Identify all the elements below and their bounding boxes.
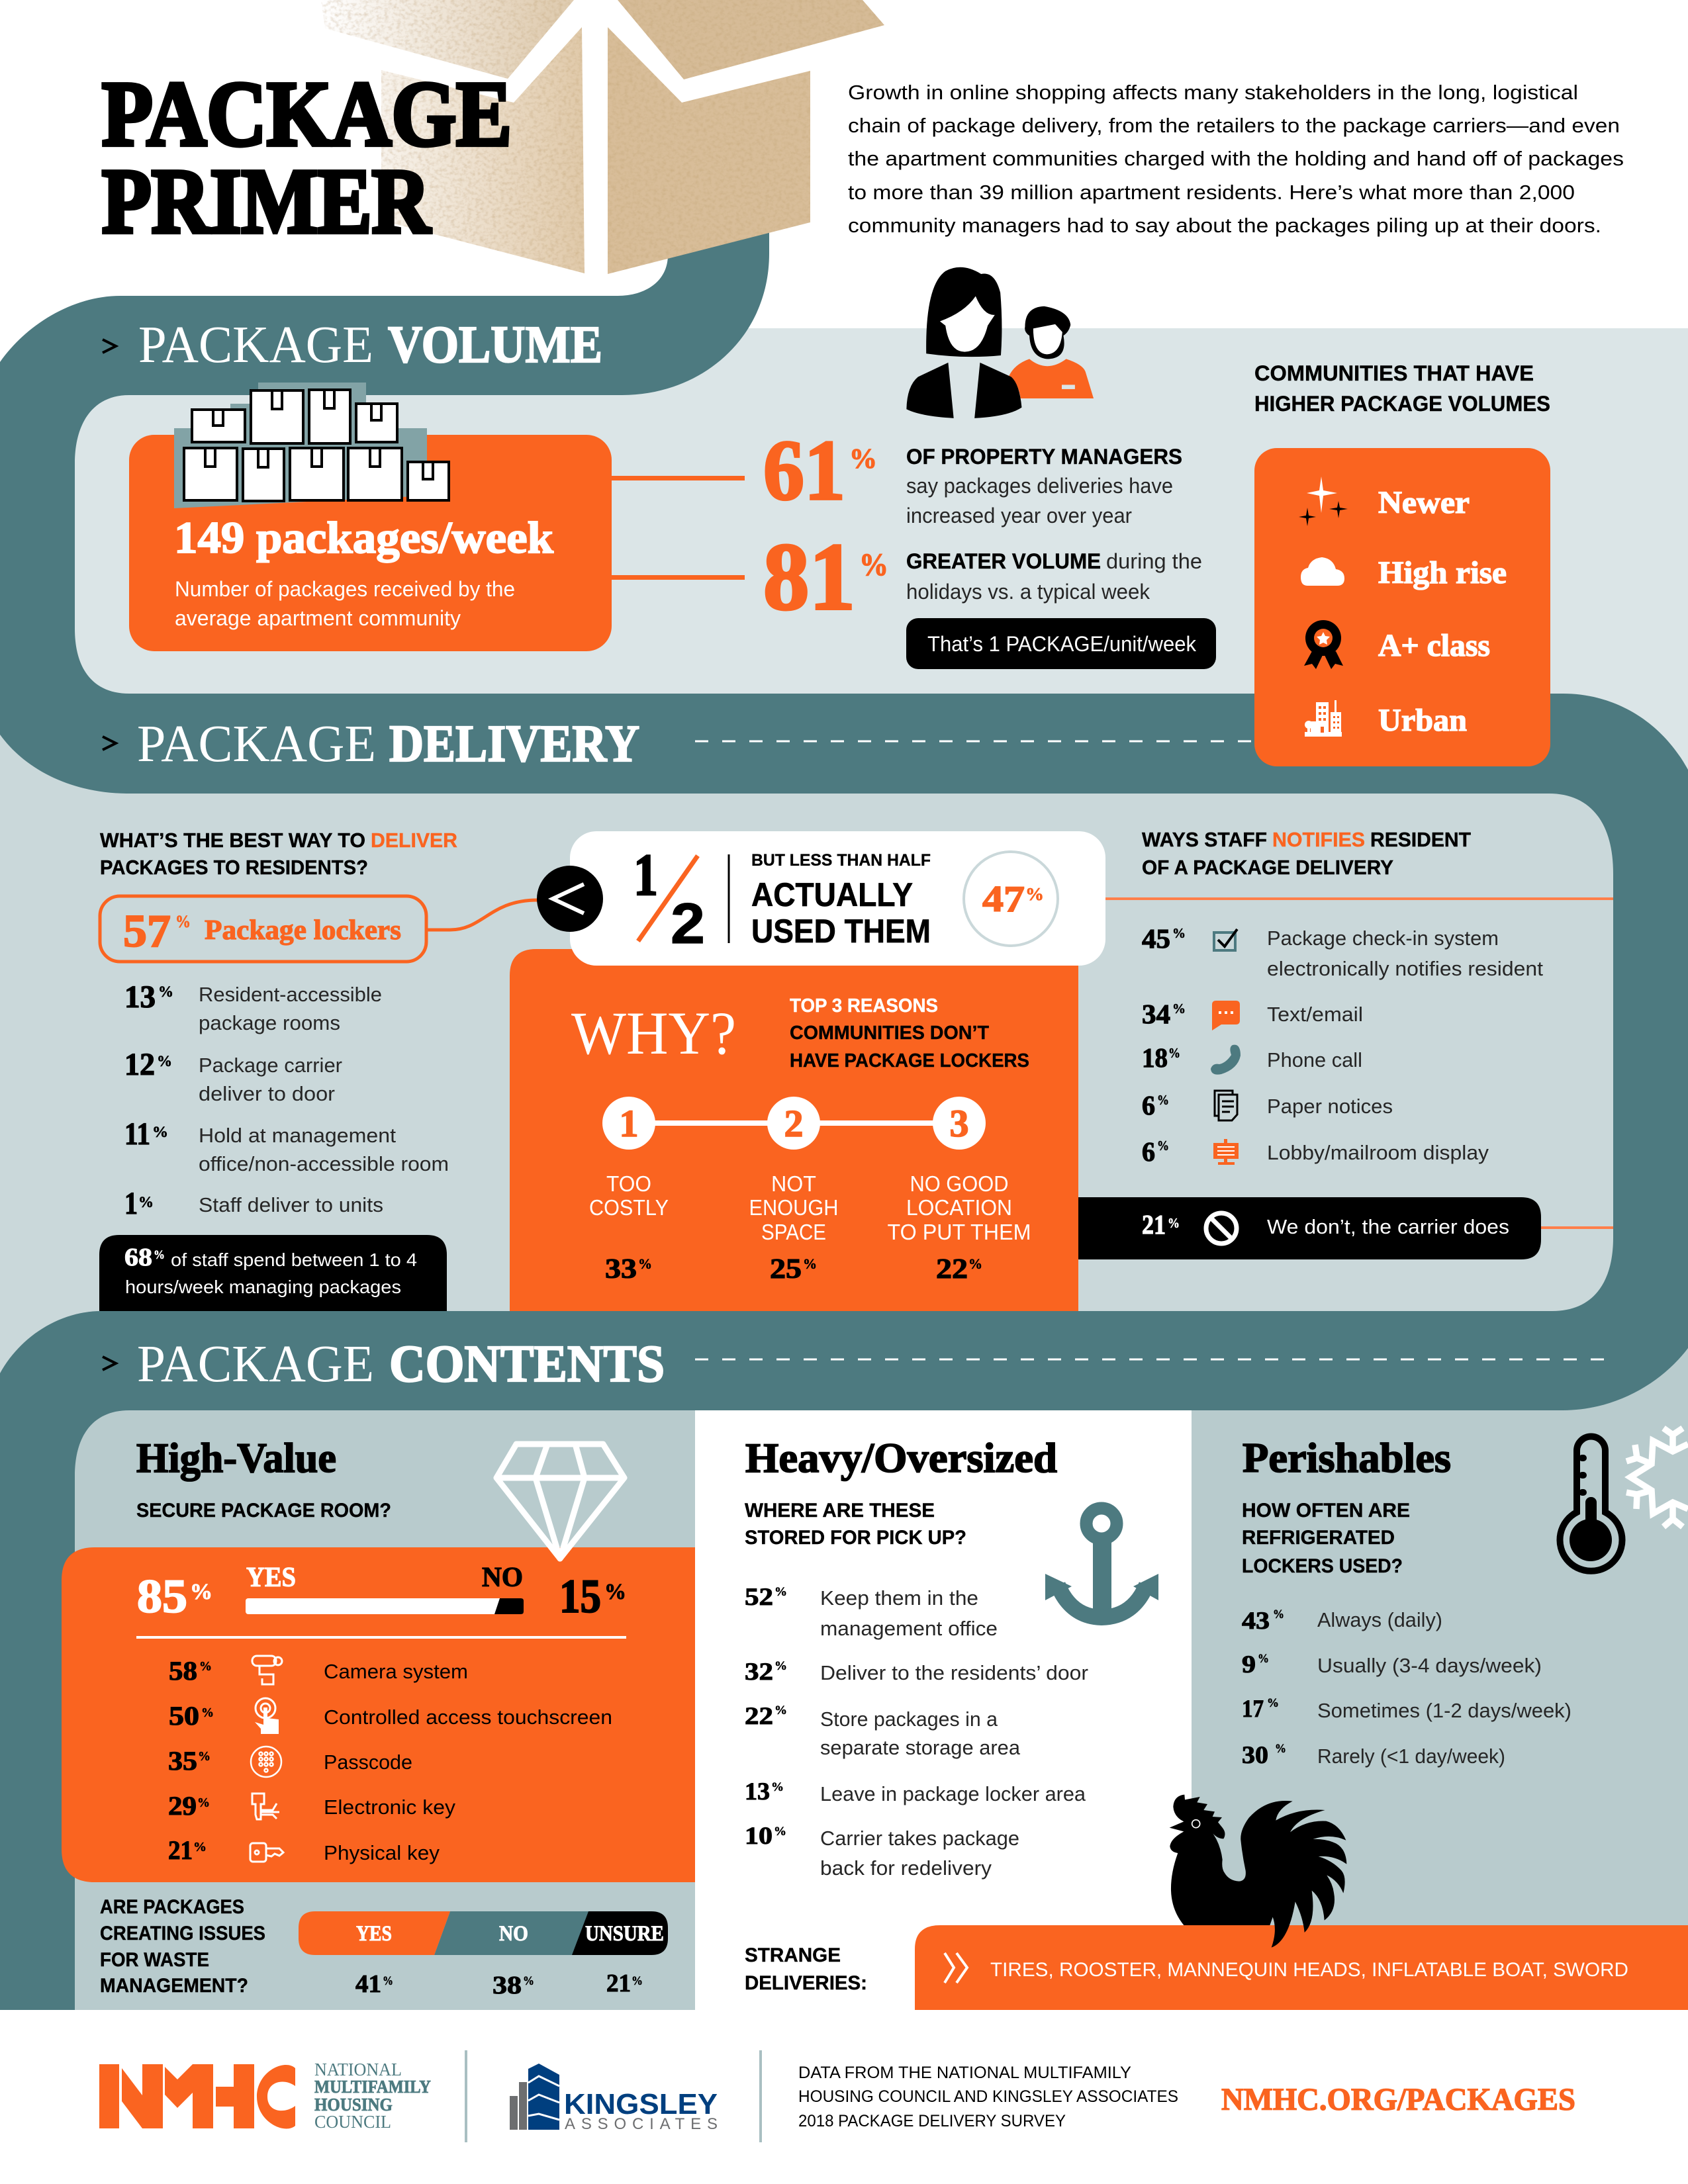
panel: 149 packages per week: 149 packages/week xyxy=(174,512,553,563)
text: property managers stat: say packages deliveries have xyxy=(906,474,1173,498)
list: security methods: % xyxy=(199,1659,212,1674)
question: best way to deliver: DELIVER xyxy=(371,829,457,852)
list: storage locations: Store packages in a xyxy=(820,1707,998,1731)
icon: diamond xyxy=(496,1444,624,1559)
icon: touchscreen xyxy=(255,1698,279,1734)
icon: lobby display xyxy=(1213,1139,1239,1165)
callout: half used them: BUT LESS THAN HALF xyxy=(751,851,931,870)
panel: why no lockers: COMMUNITIES DON’T xyxy=(790,1023,989,1044)
list: delivery methods: package rooms xyxy=(199,1011,340,1034)
text: holiday volume stat: during the xyxy=(1106,549,1202,573)
reason labels: TOO xyxy=(606,1171,651,1196)
source note: DATA FROM THE NATIONAL MULTIFAMILY xyxy=(798,2064,1131,2082)
question: waste management: CREATING ISSUES xyxy=(100,1923,265,1944)
question: ways staff notifies: RESIDENT xyxy=(1370,828,1471,851)
list: security methods: Camera system xyxy=(324,1660,468,1683)
panel: perishables: Perishables xyxy=(1243,1434,1451,1481)
panel: perishables: REFRIGERATED xyxy=(1242,1527,1395,1549)
list: notification methods: % xyxy=(1157,1138,1169,1154)
panel: perishables: LOCKERS USED? xyxy=(1242,1555,1403,1577)
panel: perishables: HOW OFTEN ARE xyxy=(1242,1500,1410,1522)
question: ways staff notifies xyxy=(1142,828,1471,879)
intro paragraph: the apartment communities charged with the holding and hand off of packages xyxy=(848,147,1624,170)
list: storage locations: 10 xyxy=(745,1823,773,1850)
list: locker usage: 43 xyxy=(1242,1608,1270,1635)
strange deliveries banner xyxy=(745,1925,1688,2010)
list: storage locations: 13 xyxy=(745,1778,770,1805)
list: security methods: 35 xyxy=(168,1746,197,1776)
list: storage locations: Carrier takes package xyxy=(820,1827,1019,1850)
cardboard box illustration xyxy=(321,0,884,274)
intro paragraph: community managers had to say about the packages piling up at their doors. xyxy=(848,214,1601,237)
question: ways staff notifies: NOTIFIES xyxy=(1272,828,1365,851)
callout: staff hours: 68 xyxy=(124,1244,152,1271)
reason percentages: 22 xyxy=(936,1254,968,1285)
heading: package volume: PACKAGE xyxy=(138,316,373,374)
text: holiday volume stat: holidays vs. a typical week xyxy=(906,580,1150,604)
panel: high-value: High-Value xyxy=(136,1434,336,1481)
callout: half used them: ACTUALLY xyxy=(751,876,913,913)
panel: heavy oversized: WHERE ARE THESE xyxy=(745,1500,935,1522)
panel: why no lockers: TOP 3 REASONS xyxy=(790,995,938,1017)
source note: 2018 PACKAGE DELIVERY SURVEY xyxy=(798,2112,1066,2130)
list: notification methods: 6 xyxy=(1142,1136,1155,1167)
list: storage locations: management office xyxy=(820,1617,998,1640)
orange security box: 85 xyxy=(137,1570,187,1623)
list: delivery methods: 1 xyxy=(124,1186,138,1221)
reason percentages: % xyxy=(638,1255,652,1272)
callout: staff hours: % xyxy=(154,1248,165,1262)
question: best way to deliver: PACKAGES TO RESIDENTS? xyxy=(100,856,368,879)
heading: package contents: PACKAGE xyxy=(137,1336,374,1393)
question: ways staff notifies: OF A PACKAGE DELIVERY xyxy=(1142,856,1393,879)
callout: package lockers: Package lockers xyxy=(205,915,401,946)
callout: half used them: USED THEM xyxy=(751,913,931,950)
callout: half used them: 1 xyxy=(633,842,658,908)
logo: NMHC: COUNCIL xyxy=(314,2112,391,2132)
icon: cloud xyxy=(1301,557,1344,586)
reason labels: COSTLY xyxy=(589,1195,669,1220)
list: delivery methods: % xyxy=(157,1053,172,1069)
connector lines xyxy=(612,476,745,580)
orange security box: % xyxy=(604,1580,626,1604)
question: waste management: ARE PACKAGES xyxy=(100,1896,244,1918)
reason percentages: 33 xyxy=(605,1254,637,1285)
orange security box: % xyxy=(190,1580,212,1604)
panel: why no lockers xyxy=(510,949,1078,1311)
panel: heavy oversized: STORED FOR PICK UP? xyxy=(745,1527,966,1549)
list: storage locations: Keep them in the xyxy=(820,1586,978,1610)
question: ways staff notifies: WAYS STAFF xyxy=(1142,828,1267,851)
chart: waste yes no unsure xyxy=(299,1911,668,1999)
text: property managers stat: increased year over year xyxy=(906,504,1132,527)
intro paragraph xyxy=(848,81,1624,237)
list: security methods: Passcode xyxy=(324,1751,412,1774)
list: notification methods: % xyxy=(1168,1045,1180,1061)
list: locker usage xyxy=(1242,1608,1571,1769)
callout: carrier notifies: 21 xyxy=(1142,1209,1166,1240)
orange security box: YES xyxy=(246,1563,296,1593)
list: storage locations: 32 xyxy=(745,1659,773,1686)
list: notification methods: % xyxy=(1157,1092,1169,1108)
list: locker usage: Always (daily) xyxy=(1317,1608,1442,1631)
callout: carrier notifies: % xyxy=(1168,1215,1180,1231)
list: storage locations: Deliver to the residents’ door xyxy=(820,1661,1088,1684)
reason labels: NOT xyxy=(771,1171,816,1196)
list: notification methods: 45 xyxy=(1142,923,1170,954)
callout: half used them xyxy=(570,831,1105,966)
text: holiday volume stat xyxy=(906,549,1202,604)
chart: waste yes no unsure: % xyxy=(523,1974,534,1988)
panel: perishables xyxy=(1242,1428,1688,1769)
callout: carrier notifies: We don’t, the carrier does xyxy=(1267,1215,1509,1238)
title: PRIMER xyxy=(102,150,432,253)
chart: waste yes no unsure: YES xyxy=(356,1922,392,1946)
list: locker usage: % xyxy=(1273,1608,1284,1621)
list: notification methods: Lobby/mailroom display xyxy=(1267,1141,1489,1164)
question: best way to deliver xyxy=(100,829,457,879)
chart: waste yes no unsure: 41 xyxy=(355,1970,381,1998)
list: notification methods: Phone call xyxy=(1267,1048,1362,1071)
list: notification methods: % xyxy=(1172,1001,1186,1017)
strange deliveries banner: TIRES, ROOSTER, MANNEQUIN HEADS, INFLATABLE BOAT, SWORD xyxy=(990,1959,1628,1981)
list: security methods: 50 xyxy=(169,1701,199,1731)
list: delivery methods: Staff deliver to units xyxy=(199,1193,383,1216)
logo: Kingsley Associates: KINGSLEY xyxy=(564,2088,718,2120)
icon: passcode xyxy=(251,1747,281,1777)
panel: high-value xyxy=(62,1434,695,1999)
orange security box xyxy=(62,1547,695,1882)
icon: double chevron xyxy=(945,1953,967,1983)
list: security methods xyxy=(168,1656,612,1865)
panel: community types: Urban xyxy=(1378,703,1467,738)
list: delivery methods: 12 xyxy=(124,1047,155,1082)
panel: 149 packages per week: average apartment community xyxy=(175,606,461,630)
orange security box: 15 xyxy=(559,1570,601,1623)
question: waste management xyxy=(100,1896,265,1997)
list: storage locations: % xyxy=(774,1704,787,1717)
list: storage locations: separate storage area xyxy=(820,1736,1021,1759)
list: storage locations: 52 xyxy=(745,1584,773,1611)
icon: less-than circle xyxy=(537,866,603,932)
list: security methods: 58 xyxy=(169,1656,197,1686)
list: locker usage: Usually (3-4 days/week) xyxy=(1317,1654,1542,1677)
list: locker usage: % xyxy=(1258,1652,1269,1666)
strange deliveries banner: DELIVERIES: xyxy=(745,1972,867,1994)
list: locker usage: 17 xyxy=(1242,1696,1264,1723)
callout: staff hours: hours/week managing packages xyxy=(125,1277,401,1297)
logo: Kingsley Associates xyxy=(510,2064,718,2133)
callout: staff hours: of staff spend between 1 to 4 xyxy=(171,1250,417,1270)
callout: one package per unit: That’s 1 PACKAGE/unit/week xyxy=(927,632,1197,656)
strange deliveries banner: STRANGE xyxy=(745,1944,841,1966)
list: delivery methods: Resident-accessible xyxy=(199,983,382,1006)
list: delivery methods: 13 xyxy=(124,979,156,1015)
intro paragraph: Growth in online shopping affects many stakeholders in the long, logistical xyxy=(848,81,1578,104)
source note: HOUSING COUNCIL AND KINGSLEY ASSOCIATES xyxy=(798,2087,1178,2106)
list: notification methods xyxy=(1142,923,1543,1167)
icon: physical key xyxy=(250,1843,283,1862)
question: waste management: FOR WASTE xyxy=(100,1949,209,1971)
icon: phone xyxy=(1211,1045,1241,1075)
reasons timeline: 2 xyxy=(784,1102,804,1145)
list: locker usage: 30 xyxy=(1242,1742,1268,1769)
reason percentages: 25 xyxy=(770,1254,802,1285)
panel: community types: High rise xyxy=(1378,555,1507,590)
icon: electronic key xyxy=(252,1794,279,1819)
list: notification methods: 6 xyxy=(1142,1090,1155,1120)
list: security methods: % xyxy=(198,1749,211,1764)
title xyxy=(102,63,512,253)
website link: NMHC.ORG/PACKAGES xyxy=(1221,2082,1575,2117)
list: storage locations: % xyxy=(774,1659,787,1673)
callout: package lockers: % xyxy=(175,912,191,931)
chart: waste yes no unsure: 21 xyxy=(606,1970,631,1997)
icon: snowflake xyxy=(1626,1428,1688,1527)
list: storage locations xyxy=(745,1584,1088,1880)
icon: rooster xyxy=(1170,1795,1346,1948)
question: best way to deliver: WHAT’S THE BEST WAY TO xyxy=(100,829,365,852)
icon: property managers xyxy=(906,267,1094,418)
reason labels: SPACE xyxy=(761,1220,826,1244)
list: storage locations: 22 xyxy=(745,1703,773,1730)
question: waste management: MANAGEMENT? xyxy=(100,1975,248,1997)
list: storage locations: Leave in package locker area xyxy=(820,1782,1086,1805)
callout: package lockers xyxy=(100,896,538,962)
list: notification methods: % xyxy=(1172,925,1186,941)
callout: half used them: % xyxy=(1025,884,1044,904)
orange security box: NO xyxy=(482,1563,523,1593)
panel: 149 packages per week xyxy=(129,383,612,651)
list: delivery methods: Package carrier xyxy=(199,1054,342,1077)
reason labels: NO GOOD xyxy=(910,1171,1009,1196)
list: security methods: % xyxy=(201,1706,214,1720)
list: security methods: Electronic key xyxy=(324,1796,456,1819)
panel: heavy oversized: Heavy/Oversized xyxy=(745,1434,1057,1481)
callout: carrier notifies xyxy=(1078,1197,1613,1259)
panel: community types: A+ class xyxy=(1378,628,1490,663)
list: notification methods: Paper notices xyxy=(1267,1095,1393,1118)
reason labels: ENOUGH xyxy=(749,1195,838,1220)
intro paragraph: chain of package delivery, from the retailers to the package carriers—and even xyxy=(848,114,1620,137)
logo: NMHC: MULTIFAMILY xyxy=(314,2077,431,2097)
panel: heavy oversized xyxy=(745,1434,1158,1880)
list: delivery methods: % xyxy=(158,983,173,1000)
list: notification methods: Package check-in system xyxy=(1267,927,1499,950)
list: security methods: Controlled access touchscreen xyxy=(324,1706,612,1729)
list: security methods: 21 xyxy=(168,1835,193,1865)
logo: Kingsley Associates: ASSOCIATES xyxy=(565,2115,718,2133)
callout: staff hours xyxy=(99,1235,447,1311)
reason labels: TO PUT THEM xyxy=(887,1220,1031,1244)
icon: thermometer xyxy=(1560,1436,1622,1571)
list: delivery methods xyxy=(124,979,449,1221)
list: security methods: Physical key xyxy=(324,1841,440,1864)
reason labels xyxy=(589,1171,1031,1244)
list: locker usage: Sometimes (1-2 days/week) xyxy=(1317,1699,1571,1722)
reasons timeline: 3 xyxy=(949,1102,969,1145)
stat: 61 percent: 61 xyxy=(763,423,845,518)
heading: higher package volumes: COMMUNITIES THAT HAVE xyxy=(1254,361,1534,385)
chart: waste yes no unsure: % xyxy=(632,1974,643,1988)
logo: NMHC: HOUSING xyxy=(314,2095,393,2115)
icon: anchor xyxy=(1045,1508,1158,1618)
source note xyxy=(798,2064,1178,2130)
heading: package contents: CONTENTS xyxy=(389,1336,665,1393)
list: storage locations: % xyxy=(774,1825,786,1839)
panel: why no lockers: HAVE PACKAGE LOCKERS xyxy=(790,1050,1029,1071)
icon: checkbox xyxy=(1214,929,1237,950)
chart: waste yes no unsure: 38 xyxy=(492,1972,522,1999)
list: delivery methods: % xyxy=(152,1124,168,1140)
list: notification methods: Text/email xyxy=(1267,1003,1363,1026)
heading: higher package volumes xyxy=(1254,361,1550,416)
list: locker usage: 9 xyxy=(1242,1651,1256,1678)
intro paragraph: to more than 39 million apartment residents. Here’s what more than 2,000 xyxy=(848,181,1575,204)
text: property managers stat xyxy=(906,445,1182,527)
list: storage locations: back for redelivery xyxy=(820,1856,992,1880)
list: delivery methods: Hold at management xyxy=(199,1124,396,1147)
callout: half used them: 2 xyxy=(671,892,705,956)
list: delivery methods: % xyxy=(138,1194,154,1210)
reason labels: LOCATION xyxy=(906,1195,1012,1220)
reasons timeline xyxy=(602,1097,986,1150)
list: storage locations: % xyxy=(771,1780,784,1794)
reason percentages xyxy=(605,1254,982,1285)
reason percentages: % xyxy=(968,1255,982,1272)
stat: 61 percent: % xyxy=(849,444,877,475)
list: notification methods: 34 xyxy=(1142,999,1170,1029)
list: storage locations: % xyxy=(774,1585,787,1599)
heading: package delivery: DELIVERY xyxy=(389,715,639,773)
list: notification methods: electronically notifies resident xyxy=(1267,957,1543,980)
heading: higher package volumes: HIGHER PACKAGE VOLUMES xyxy=(1254,392,1550,416)
title: PACKAGE xyxy=(102,63,512,165)
heading: package volume: VOLUME xyxy=(388,316,602,374)
icon: city xyxy=(1305,700,1342,737)
background panels xyxy=(0,328,1688,2010)
heading: package volume xyxy=(103,316,602,374)
stat: 81 percent: % xyxy=(859,547,888,582)
list: notification methods: 18 xyxy=(1142,1042,1168,1073)
chart: waste yes no unsure: % xyxy=(383,1974,393,1988)
callout: one package per unit xyxy=(906,618,1216,669)
text: property managers stat: OF PROPERTY MANAGERS xyxy=(906,445,1182,469)
logo: NMHC xyxy=(99,2060,431,2132)
text: holiday volume stat: GREATER VOLUME xyxy=(906,549,1101,573)
panel: community types xyxy=(1254,448,1550,766)
list: locker usage: % xyxy=(1275,1742,1286,1756)
panel: 149 packages per week: Number of packages received by the xyxy=(175,577,515,601)
panel: high-value: SECURE PACKAGE ROOM? xyxy=(136,1500,391,1522)
list: locker usage: % xyxy=(1267,1696,1279,1710)
chart: waste yes no unsure: UNSURE xyxy=(585,1922,664,1946)
icon: camera xyxy=(252,1656,282,1684)
list: security methods: % xyxy=(193,1840,207,1854)
chart: waste yes no unsure: NO xyxy=(499,1922,528,1946)
icon: stack of packages xyxy=(174,383,449,508)
icon: paper notices xyxy=(1215,1091,1237,1120)
reasons timeline: 1 xyxy=(620,1102,638,1145)
list: security methods: % xyxy=(197,1796,210,1810)
heading: package delivery xyxy=(103,715,1254,773)
panel: community types: Newer xyxy=(1378,485,1470,520)
reason percentages: % xyxy=(803,1255,817,1272)
logo: NMHC: NATIONAL xyxy=(314,2060,402,2079)
callout: half used them: 47 xyxy=(982,879,1025,920)
icon: message bubble xyxy=(1212,1001,1240,1030)
icon: sparkles xyxy=(1299,477,1348,526)
heading: package contents xyxy=(103,1336,1605,1393)
list: delivery methods: 11 xyxy=(124,1116,150,1152)
stat: 81 percent: 81 xyxy=(763,524,855,630)
list: delivery methods: deliver to door xyxy=(199,1082,335,1105)
panel: why no lockers: WHY? xyxy=(571,999,736,1067)
list: locker usage: Rarely (<1 day/week) xyxy=(1317,1745,1505,1768)
heading: package delivery: PACKAGE xyxy=(137,715,376,773)
list: delivery methods: office/non-accessible room xyxy=(199,1152,449,1175)
list: security methods: 29 xyxy=(168,1791,197,1821)
icon: award ribbon xyxy=(1304,620,1343,669)
callout: package lockers: 57 xyxy=(123,906,171,957)
